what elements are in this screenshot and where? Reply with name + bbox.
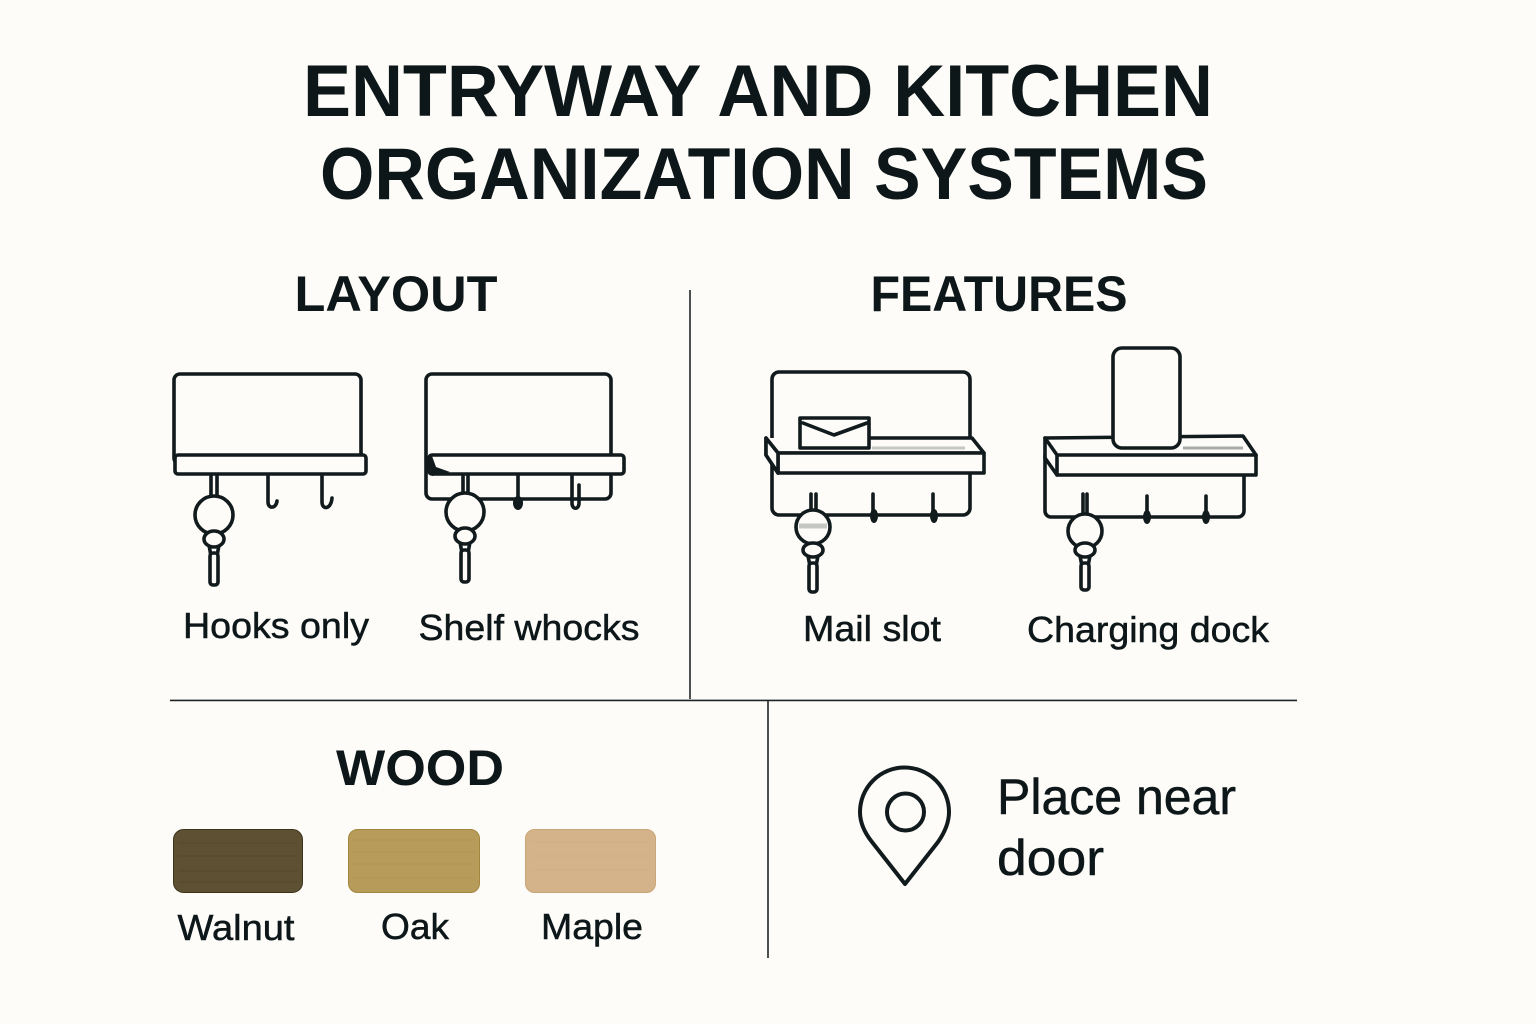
icon: charging dock rack [1045, 348, 1256, 590]
icon: phone [1113, 348, 1180, 448]
icon: envelope [800, 418, 869, 448]
swatch: maple [526, 830, 656, 892]
text: place near door [997, 769, 1236, 886]
heading: layout: LAYOUT [294, 266, 498, 322]
icon: mail slot rack [766, 372, 984, 592]
label: mail slot: Mail slot [803, 608, 941, 649]
text: place near door: Place near [997, 769, 1236, 825]
title: ORGANIZATION SYSTEMS [320, 134, 1208, 215]
label: maple: Maple [541, 906, 643, 947]
label: walnut: Walnut [178, 907, 294, 948]
label: oak: Oak [381, 906, 450, 947]
icon: shelf with hooks rack [426, 374, 624, 582]
title [303, 51, 1213, 215]
title: ENTRYWAY AND KITCHEN [303, 51, 1213, 132]
heading: wood: WOOD [336, 740, 504, 796]
swatch: oak [348, 830, 480, 892]
label: hooks only: Hooks only [183, 605, 369, 646]
swatch: walnut [174, 830, 302, 892]
icon: location pin [860, 768, 949, 884]
text: place near door: door [997, 830, 1104, 886]
icon: hooks only rack [174, 374, 366, 585]
label: shelf whocks: Shelf whocks [418, 607, 640, 648]
heading: features: FEATURES [870, 266, 1128, 322]
label: charging dock: Charging dock [1027, 609, 1270, 650]
